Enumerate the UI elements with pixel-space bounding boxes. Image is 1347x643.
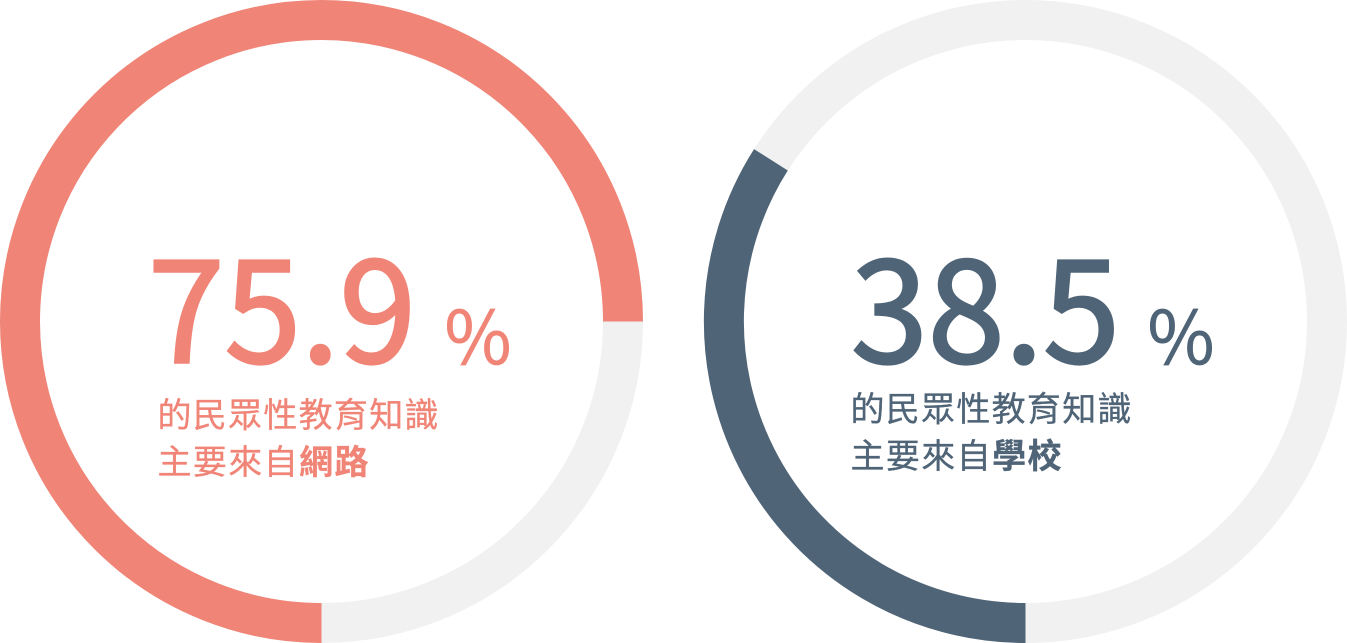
- caption line 1: 的民眾性教育知識: [850, 382, 1132, 431]
- donut track: school: [724, 20, 1327, 623]
- donut arc: 75.9 percent: [20, 20, 623, 623]
- caption line 1: 的民眾性教育知識: [158, 388, 438, 437]
- panel: school donut: [724, 20, 1327, 623]
- percent sign: %: [444, 279, 512, 386]
- donut arc: 38.5 percent: [724, 160, 1026, 623]
- caption line 2: 主要來自學校: [850, 429, 1062, 478]
- panel: internet donut: [20, 20, 623, 623]
- caption line 2: 主要來自網路: [158, 435, 368, 484]
- big number: 38.5: 38.5: [851, 202, 1120, 404]
- big number: 75.9: 75.9: [148, 202, 416, 404]
- percent sign: %: [1148, 279, 1214, 386]
- donut track: internet: [20, 20, 623, 623]
